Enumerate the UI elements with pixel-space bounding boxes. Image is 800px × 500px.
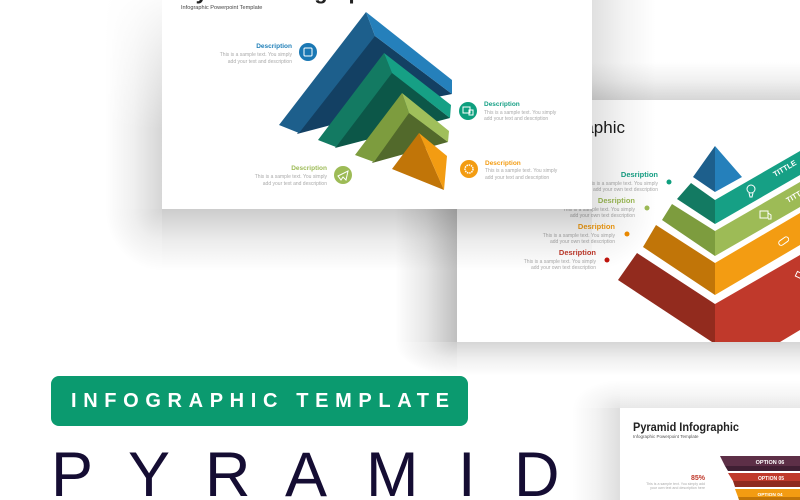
label: teal description: Desription: [621, 170, 658, 179]
teal pyramid: [318, 53, 451, 148]
chart: layered pyramid: [618, 146, 800, 342]
option 04 bar: OPTION 04: [757, 492, 783, 498]
callout: blue description: add your text and description: [228, 59, 292, 65]
blue pyramid: [279, 12, 452, 134]
callout: blue description: [220, 43, 317, 65]
callout: teal description: This is a sample text. You simply: [484, 110, 557, 116]
badge: infographic template: [51, 376, 468, 426]
option 06 bar: [720, 456, 800, 471]
heading: slide title: Pyramid Infographic: [633, 422, 740, 434]
callout: teal description: [459, 101, 557, 122]
label: teal description: [586, 170, 658, 193]
orange layer: [643, 213, 800, 295]
callout: orange description: This is a sample text. You simply: [485, 168, 558, 174]
teal layer: TITTLE: [772, 158, 798, 179]
pyramid cap: [693, 146, 742, 192]
label: red description: Desription: [559, 248, 596, 257]
stat: 85%: [646, 475, 706, 490]
label: red description: add your own text description: [531, 265, 596, 271]
label: red description: This is a sample text. You simply: [524, 259, 596, 265]
callout: green description: add your text and description: [263, 181, 327, 187]
label: teal description: add your own text description: [593, 187, 658, 193]
label: red description: [524, 248, 596, 271]
label: green description: add your own text description: [570, 213, 635, 219]
callout: orange description: Description: [485, 160, 521, 167]
label: orange description: This is a sample text. You simply: [543, 233, 615, 239]
orange pyramid: [392, 133, 447, 190]
label: orange description: [543, 222, 615, 245]
callout: orange description: add your text and description: [485, 175, 549, 181]
option 04 bar: [735, 489, 800, 500]
heading: slide title: Pyramid Infographic: [474, 118, 625, 137]
option 05 bar: OPTION 05: [758, 476, 784, 482]
chart: nested pyramids: [279, 12, 452, 190]
callout: green description: This is a sample text. You simply: [255, 174, 327, 180]
green layer: [662, 182, 800, 256]
teal layer: [677, 151, 800, 224]
callout: green description: Description: [291, 165, 327, 172]
icon: truck: [459, 102, 477, 120]
stat: 85%: This is a sample text. You simply add: [646, 482, 705, 486]
slide: options pyramid (bottom right): [572, 380, 800, 500]
callout: blue description: Description: [256, 43, 292, 50]
subtitle: Infographic Powerpoint Template: [633, 434, 699, 439]
green pyramid: [355, 93, 449, 163]
callout: green description: [255, 165, 352, 187]
marker dots: [604, 180, 672, 262]
label: orange description: add your own text description: [550, 239, 615, 245]
slide: stepped pyramid (top): [100, 0, 656, 271]
icon: gear: [460, 160, 478, 178]
callout: blue description: This is a sample text. You simply: [220, 52, 292, 58]
option 05 bar: [728, 473, 800, 487]
red layer: [618, 253, 800, 342]
icon: calendar: [299, 43, 317, 61]
label: green description: [563, 196, 635, 219]
callout: teal description: Description: [484, 101, 520, 108]
label: orange description: Desription: [578, 222, 615, 231]
label: green description: This is a sample text. You simply: [563, 207, 635, 213]
option 06 bar: OPTION 06: [756, 460, 784, 466]
callout: orange description: [460, 160, 558, 181]
slide: pyramid layers (right): [395, 62, 800, 376]
label: green description: Desription: [598, 196, 635, 205]
icon: paper plane: [334, 166, 352, 184]
subtitle: Infographic Powerpoint Template: [181, 5, 262, 11]
badge: infographic template: INFOGRAPHIC TEMPLATE: [71, 390, 449, 412]
stat: 85%: 85%: [691, 475, 706, 482]
callout: teal description: add your text and description: [484, 116, 548, 122]
label: teal description: This is a sample text. You simply: [586, 181, 658, 187]
stat: 85%: your own text and description here: [650, 486, 705, 490]
